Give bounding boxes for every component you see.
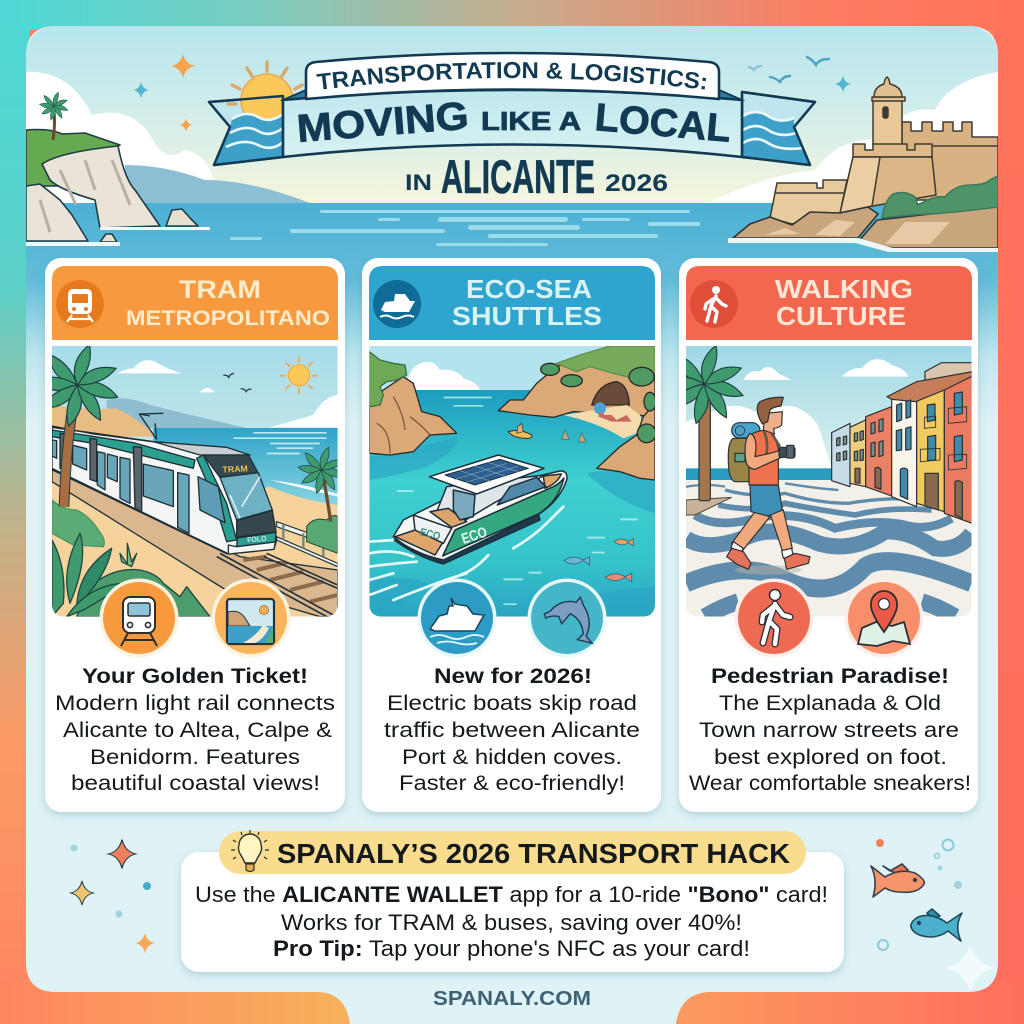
callout: transport hack: [181, 830, 844, 972]
subtitle: 2026: [605, 170, 668, 197]
walking text block: The Explanada & Old: [719, 692, 941, 715]
palm trunk: [686, 346, 744, 516]
top white band: [306, 53, 719, 99]
illustration: solar boat in cove: ECO: [460, 525, 489, 548]
boat wake: [369, 507, 563, 600]
walking header: [686, 266, 972, 340]
eco-sea header: [369, 266, 655, 340]
main palm: [52, 346, 119, 507]
hack text block: Use the ALICANTE WALLET app for a 10-ride "Bono" card!: [195, 882, 828, 907]
tram text block: Modern light rail connects: [55, 692, 335, 715]
walking header: CULTURE: [776, 301, 906, 331]
icon: boat circle: [418, 578, 496, 658]
decorative fish and bubbles right: [871, 839, 996, 991]
walker: [727, 397, 810, 575]
eco-sea text block: Port & hidden coves.: [402, 746, 622, 769]
illustration: tram on coastal line: TRAM: [222, 463, 248, 475]
sparkles and birds: [134, 54, 851, 132]
tram header: TRAM: [179, 276, 261, 304]
hack text block: Works for TRAM & buses, saving over 40%!: [281, 910, 742, 935]
walking text block: Wear comfortable sneakers!: [689, 772, 971, 795]
card: walking: [663, 258, 978, 812]
hack heading pill: SPANALY’S 2026 TRANSPORT HACK: [277, 838, 790, 869]
tram header: METROPOLITANO: [126, 307, 330, 330]
left cliffs: [26, 130, 198, 242]
walking text block: Pedestrian Paradise!: [711, 665, 949, 688]
fence: [277, 522, 338, 567]
icon: orange fish: [871, 864, 924, 897]
main title: MOVING: [295, 95, 470, 151]
walking header: WALKING: [775, 274, 913, 304]
icon: blue fish: [911, 909, 962, 941]
main ribbon band: [283, 90, 742, 157]
icon: coastal picture circle: [212, 578, 290, 658]
distant mountains: [125, 165, 310, 203]
tram text block: Alicante to Altea, Calpe &: [63, 719, 332, 742]
fish: [564, 539, 633, 582]
icon: walker: [690, 280, 738, 328]
tram: [52, 413, 277, 554]
ribbon tail right: [742, 92, 815, 165]
eco-sea text block: New for 2026!: [434, 665, 592, 688]
subtitle: [406, 160, 667, 194]
wave pavement: [686, 483, 972, 617]
ribbon tail left: [209, 62, 302, 165]
tram header: [52, 266, 338, 340]
illustration: tram on coastal line: FOLO: [247, 534, 267, 544]
tram text block: beautiful coastal views!: [71, 772, 320, 795]
title banner: TRANSPORTATION & LOGISTICS:: [316, 62, 706, 90]
beach people: [508, 402, 632, 442]
footer url: SPANALY.COM: [433, 988, 591, 1010]
walking text block: [689, 665, 971, 795]
illustration: tram on coastal line: [34, 342, 346, 617]
clouds: [26, 72, 998, 204]
sun and birds: [223, 357, 317, 393]
eco-sea text block: Faster & eco-friendly!: [399, 772, 625, 795]
header scene: [26, 26, 998, 406]
hack text block: Pro Tip: Tap your phone's NFC as your card!: [273, 936, 750, 961]
icon: boat: [373, 280, 421, 328]
icon: map pin circle: [844, 578, 924, 658]
icon: walking circle: [734, 578, 814, 658]
eco-sea text block: traffic between Alicante: [384, 719, 640, 742]
decorative sparkles left: [70, 840, 155, 953]
subtitle: IN: [405, 170, 432, 195]
tram text block: Your Golden Ticket!: [82, 665, 308, 688]
castle rocks and bushes: [733, 176, 998, 248]
solar boat: [393, 455, 567, 564]
walking text block: Town narrow streets are: [699, 719, 959, 742]
illustration: solar boat in cove: ECO: [419, 526, 442, 543]
card: tram: [34, 258, 346, 812]
palm on cliff: [39, 91, 69, 140]
left rocks: [369, 352, 457, 455]
card: eco-sea: [362, 258, 661, 812]
title banner: [208, 52, 816, 194]
small palm: [298, 446, 338, 522]
illustration: walker on explanada: [663, 343, 972, 617]
hack text block: [195, 882, 828, 961]
buildings: [832, 363, 972, 523]
sea: [26, 203, 998, 423]
icon: lightbulb: [231, 830, 269, 872]
icon: tram circle: [100, 578, 178, 658]
kicker title: [318, 78, 708, 90]
main title: LIKE A: [481, 106, 581, 136]
subtitle: ALICANTE: [441, 150, 595, 203]
right rocks and cave: [498, 346, 656, 480]
tram text block: Benidorm. Features: [90, 746, 300, 769]
eco-sea header: ECO-SEA: [466, 274, 592, 304]
illustration: solar boat in cove: [369, 346, 656, 617]
foreground plants: [52, 500, 210, 617]
eco-sea header: SHUTTLES: [452, 301, 602, 331]
eco-sea text block: Electric boats skip road: [387, 692, 637, 715]
icon: train: [56, 280, 104, 328]
hack heading pill: [219, 830, 806, 874]
walking text block: best explored on foot.: [714, 746, 947, 769]
main title: [298, 102, 730, 142]
tram text block: [55, 665, 335, 795]
track bed: [52, 468, 338, 617]
main title: LOCAL: [593, 96, 732, 151]
eco-sea text block: [384, 665, 640, 795]
icon: dolphin circle: [528, 578, 606, 658]
castle on the right: [770, 77, 998, 224]
sun: [228, 62, 302, 126]
